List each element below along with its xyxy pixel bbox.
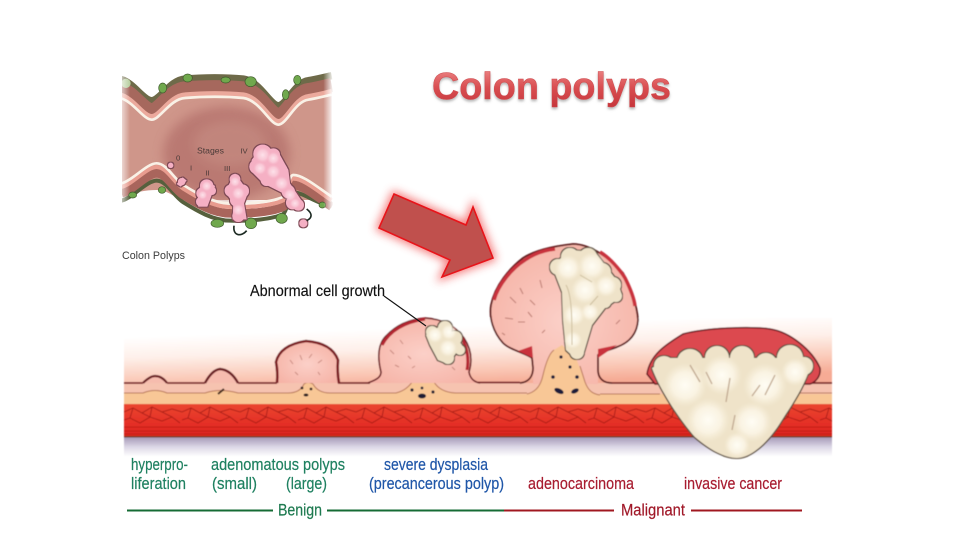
stage labels — [176, 145, 248, 178]
polyp progression diagram — [124, 244, 832, 458]
polyp: invasive cancer — [647, 328, 820, 458]
label: severe dysplasia — [369, 455, 504, 493]
stage labels: II — [205, 169, 210, 178]
label: adenocarcinoma: adenocarcinoma — [528, 474, 634, 493]
baseline — [124, 382, 832, 384]
upper colon wall — [120, 54, 332, 125]
submucosa layer — [124, 394, 832, 405]
stage labels: Stages — [197, 145, 225, 155]
submucosa bumps — [124, 378, 520, 404]
arrow pointing to polyp — [379, 194, 493, 277]
abnormal growth label: Abnormal cell growth — [250, 283, 385, 300]
title: Colon polyps — [432, 66, 671, 108]
muscle layer — [124, 404, 832, 438]
lumen glow — [124, 318, 832, 384]
label: adenomatous polyps: (small) — [212, 474, 257, 493]
label: adenomatous polyps — [211, 455, 345, 493]
label: invasive cancer: invasive cancer — [684, 474, 782, 493]
polyp: severe dysplasia — [368, 318, 480, 398]
label: hyperproliferation: liferation — [131, 474, 186, 493]
label: hyperproliferation — [131, 455, 188, 493]
benign scale: Benign — [278, 500, 322, 520]
serosa shadow — [124, 438, 832, 456]
label: hyperproliferation: hyperpro- — [131, 455, 188, 474]
polyp: hyperproliferation — [143, 376, 167, 383]
stage labels: I — [190, 164, 192, 173]
polyp: adenocarcinoma — [490, 244, 638, 404]
edge fades — [117, 60, 338, 217]
label: severe dysplasia: (precancerous polyp) — [369, 474, 504, 493]
stage labels: 0 — [176, 153, 180, 162]
malignant scale: Malignant — [621, 500, 685, 520]
illustration: colon cross-section with stages — [117, 54, 338, 247]
stage labels — [131, 455, 782, 493]
inset caption: Colon Polyps — [122, 250, 185, 262]
label: adenomatous polyps: (large) — [286, 474, 327, 493]
label pointer — [384, 296, 426, 326]
stage labels: IV — [240, 147, 248, 156]
label: severe dysplasia: severe dysplasia — [384, 455, 488, 474]
green fat nodules — [121, 74, 326, 229]
colon lumen — [122, 90, 332, 200]
polyp: small adenoma — [205, 369, 238, 394]
polyp: large adenoma — [276, 341, 339, 396]
spread arrows — [234, 209, 311, 235]
mucosa layer — [124, 383, 832, 395]
polyp stages 0 to IV — [168, 145, 307, 227]
lower colon wall — [122, 163, 332, 247]
boundary line — [124, 378, 832, 394]
label: adenomatous polyps: adenomatous polyps — [211, 455, 345, 474]
stage labels: III — [224, 164, 230, 173]
